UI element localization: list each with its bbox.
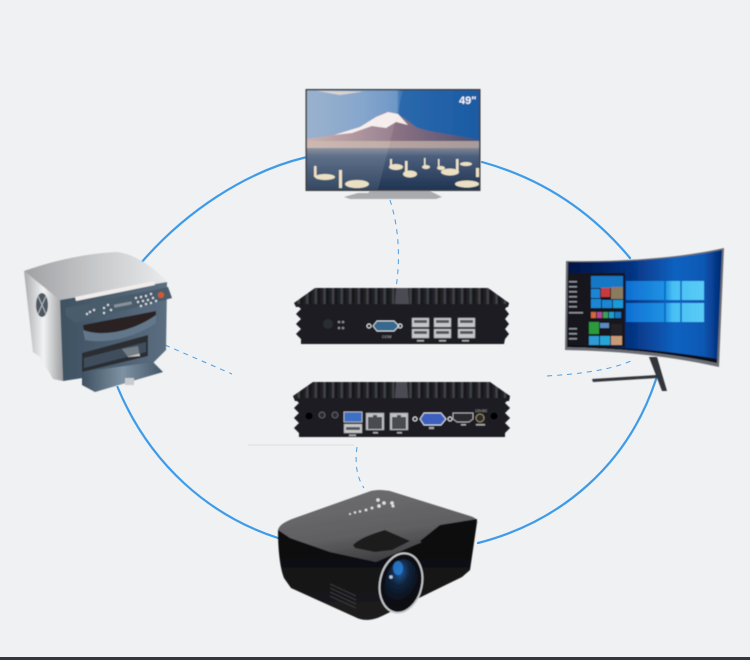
tv snow cap — [334, 112, 408, 135]
mini PC: network and video side — [293, 382, 510, 437]
faint shelf line — [248, 444, 354, 446]
tv stand — [344, 191, 442, 199]
lens — [374, 549, 428, 617]
projector top — [278, 490, 477, 562]
paper tray — [82, 362, 163, 392]
projector body — [278, 522, 477, 620]
bottom bar — [0, 657, 750, 660]
tv swans — [314, 158, 479, 188]
windows logo — [626, 281, 704, 322]
COM port: COM — [382, 334, 391, 339]
red button — [158, 292, 164, 298]
side screws — [306, 412, 498, 420]
start menu — [567, 273, 625, 347]
tv glass reflection — [307, 90, 403, 190]
output bin — [83, 315, 156, 341]
tray latch — [125, 378, 134, 385]
top button row — [349, 498, 394, 515]
monitor stand — [592, 357, 667, 391]
tv size label: 49" — [459, 95, 476, 107]
tv mountain — [307, 112, 478, 149]
paper opening — [82, 335, 148, 372]
vent grille — [330, 584, 356, 608]
right glossy panel — [420, 519, 477, 545]
inner tray — [84, 342, 146, 368]
paper sheet — [122, 346, 140, 357]
taskbar — [567, 345, 717, 363]
display — [114, 301, 132, 308]
printer — [24, 252, 172, 392]
heatsink fins top — [293, 382, 510, 401]
side vent — [36, 293, 48, 317]
monitor bezel — [565, 248, 724, 367]
connection ring — [118, 158, 658, 543]
case front — [296, 304, 509, 344]
USB slots — [414, 320, 473, 334]
vent grille — [38, 296, 46, 314]
port marks — [349, 424, 485, 436]
tv screen sky — [307, 90, 479, 148]
centre bar — [395, 382, 408, 398]
LAN sockets — [368, 415, 406, 429]
tv cloud — [317, 91, 363, 95]
COM port — [367, 321, 402, 339]
DC jack — [476, 414, 484, 422]
case front — [294, 398, 510, 437]
tv lake — [307, 148, 479, 190]
mini PC: serial and USB side — [294, 288, 509, 344]
audio jacks — [319, 412, 338, 418]
start tiles — [589, 276, 623, 345]
tv bezel — [306, 89, 480, 191]
television — [306, 89, 480, 199]
curved monitor — [565, 248, 724, 391]
USB3 stack — [344, 412, 362, 433]
USB marks — [417, 340, 469, 342]
start list — [569, 281, 583, 340]
scanner strip — [75, 281, 155, 301]
focus recess — [353, 530, 410, 552]
heatsink fins top — [294, 288, 509, 307]
printer front — [60, 282, 167, 381]
monitor screen — [567, 250, 722, 363]
projector — [278, 490, 477, 620]
output slot — [83, 311, 156, 334]
indicator leds — [338, 321, 344, 329]
control panel — [65, 287, 172, 323]
dashed links — [165, 200, 631, 488]
power label: 12V-DC — [475, 409, 488, 413]
LAN ports — [366, 413, 408, 430]
printer top — [24, 252, 167, 301]
power button — [323, 319, 333, 329]
VGA port — [413, 413, 452, 425]
centre bar — [395, 288, 409, 305]
tv haze — [307, 141, 479, 149]
panel keys — [86, 293, 157, 315]
printer side — [24, 271, 63, 381]
HDMI port — [453, 413, 473, 422]
USB stacks — [412, 318, 475, 338]
